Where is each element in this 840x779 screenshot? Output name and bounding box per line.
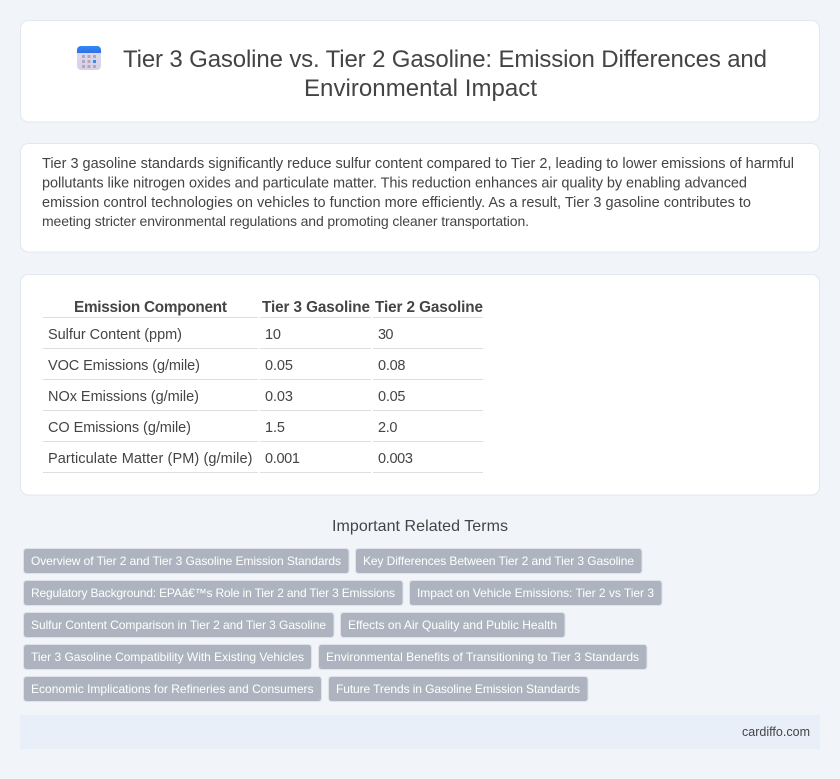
- panel: summary text: Tier 3 gasoline standards significantly reduce sulfur content compared to Tier 2, leading to lower emissions of harmful: [42, 156, 794, 172]
- footer: cardiffo.com: [742, 725, 810, 739]
- table rows: CO Emissions (g/mile): [48, 420, 191, 436]
- panel: summary text: pollutants like nitrogen oxides and particulate matter. This reduction enhances air quality by enabling advanced: [42, 176, 747, 192]
- table rows: 0.08: [378, 358, 406, 374]
- table rows: 30: [378, 327, 394, 343]
- table rows: VOC Emissions (g/mile): [48, 358, 200, 374]
- title: Tier 3 Gasoline vs. Tier 2 Gasoline: Emission Differences and: [123, 46, 767, 73]
- footer: [20, 715, 820, 749]
- related term tags: Environmental Benefits of Transitioning to Tier 3 Standards: [326, 650, 639, 664]
- table rows: 0.05: [378, 389, 406, 405]
- related term tags: Economic Implications for Refineries and Consumers: [31, 682, 314, 696]
- table rows: 1.5: [265, 420, 285, 436]
- related term tags: Regulatory Background: EPAâ€™s Role in Tier 2 and Tier 3 Emissions: [31, 586, 395, 600]
- title: Environmental Impact: [304, 75, 537, 102]
- icon: calendar: [77, 46, 101, 70]
- panel: summary text: [20, 144, 820, 252]
- table rows: 2.0: [378, 420, 398, 436]
- table header: [74, 299, 483, 316]
- panel: summary text: meeting stricter environmental regulations and promoting cleaner transportation.: [42, 213, 529, 229]
- related term tags: Overview of Tier 2 and Tier 3 Gasoline Emission Standards: [31, 554, 341, 568]
- table rows: 0.001: [265, 451, 300, 467]
- related term tags: Tier 3 Gasoline Compatibility With Existing Vehicles: [31, 650, 304, 664]
- heading: related terms: Important Related Terms: [332, 518, 508, 535]
- related term tags: Sulfur Content Comparison in Tier 2 and Tier 3 Gasoline: [31, 618, 326, 632]
- table rows: NOx Emissions (g/mile): [48, 389, 199, 405]
- table header: Tier 2 Gasoline: [375, 299, 483, 316]
- related term tags: [24, 548, 662, 702]
- panel: emissions table: [20, 274, 820, 495]
- table rows: 10: [265, 327, 281, 343]
- related term tags: Key Differences Between Tier 2 and Tier 3 Gasoline: [363, 554, 634, 568]
- table rows: Particulate Matter (PM) (g/mile): [48, 451, 252, 467]
- table rows: 0.03: [265, 389, 293, 405]
- table rows: 0.05: [265, 358, 293, 374]
- panel: title card: [20, 20, 820, 122]
- panel: summary text: emission control technologies on vehicles to function more efficiently. As a result, Tier 3 gasoline contributes to: [42, 195, 751, 211]
- related term tags: Impact on Vehicle Emissions: Tier 2 vs Tier 3: [417, 586, 654, 600]
- table header: Tier 3 Gasoline: [262, 299, 370, 316]
- table rows: 0.003: [378, 451, 413, 467]
- related term tags: Effects on Air Quality and Public Health: [348, 618, 557, 632]
- title: [123, 46, 767, 102]
- table header: Emission Component: [74, 299, 227, 316]
- related term tags: Future Trends in Gasoline Emission Standards: [336, 682, 580, 696]
- table rows: [48, 327, 413, 467]
- table rows: Sulfur Content (ppm): [48, 327, 182, 343]
